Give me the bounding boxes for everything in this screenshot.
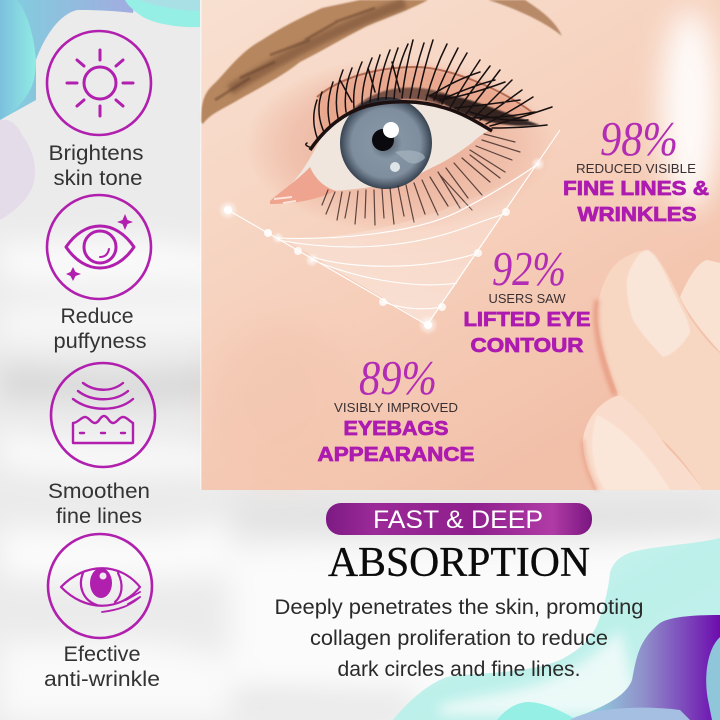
stat: 89%: APPEARANCE	[318, 443, 474, 466]
stat: 89%: EYEBAGS	[344, 417, 448, 440]
lid and under-eye shading	[245, 57, 555, 233]
stat: 98%: FINE LINES &	[563, 177, 709, 200]
heading: absorption: ABSORPTION	[328, 540, 590, 586]
stat: 89%: VISIBLY IMPROVED	[334, 400, 458, 415]
lift web fill	[283, 164, 538, 325]
cheek highlight	[660, 10, 720, 210]
bottom-right wave shapes	[393, 538, 720, 720]
benefit: smoothen fine lines: Smoothen	[48, 480, 150, 503]
benefit: brightens skin tone: Brightens	[48, 142, 144, 165]
stat: 92%: USERS SAW	[488, 291, 566, 306]
body text: collagen proliferation to reduce	[310, 627, 608, 650]
benefit: effective anti-wrinkle	[44, 534, 160, 691]
benefit: effective anti-wrinkle: Efective	[64, 643, 140, 666]
lift web lines	[228, 130, 560, 325]
stat: 89%	[318, 350, 474, 466]
stat: 92%: 92%	[492, 241, 566, 296]
benefit: effective anti-wrinkle: anti-wrinkle	[44, 668, 160, 691]
fingers	[597, 251, 720, 490]
stat: 98%	[563, 111, 709, 226]
benefit: reduce puffiness: Reduce	[60, 305, 134, 328]
eyebrow left	[201, 0, 428, 124]
eyebrow right	[488, 0, 562, 36]
upper lid line	[310, 102, 492, 150]
body text: Deeply penetrates the skin, promoting	[274, 596, 644, 619]
eye white	[272, 102, 490, 203]
body text: dark circles and fine lines.	[338, 658, 580, 681]
icon: sun	[47, 31, 151, 135]
icon: eye with sparkles	[47, 195, 151, 299]
lift web sparkle points	[218, 157, 545, 335]
eye photo panel	[200, 0, 720, 490]
top-left teal shapes	[0, 0, 200, 220]
benefit: reduce puffiness	[47, 195, 151, 353]
iris	[340, 97, 432, 189]
stat: 92%: CONTOUR	[470, 334, 584, 357]
lower lashes	[322, 134, 520, 225]
stat: 98%: REDUCED VISIBLE	[576, 161, 696, 176]
pupil	[372, 129, 394, 151]
icon: skin layers	[51, 363, 155, 467]
left edge of photo	[200, 0, 202, 490]
eye highlights	[383, 122, 399, 138]
benefit: reduce puffiness: puffyness	[54, 330, 146, 353]
pill: fast and deep: FAST & DEEP	[373, 506, 543, 534]
benefit: brightens skin tone	[47, 31, 151, 190]
stat: 98%: WRINKLES	[578, 203, 696, 226]
upper lashes	[306, 40, 552, 148]
icon: eye with wrinkles	[48, 534, 152, 638]
pill: fast and deep	[326, 503, 592, 535]
body text	[274, 596, 644, 681]
benefit: brightens skin tone: skin tone	[54, 167, 142, 190]
stat: 92%	[464, 241, 590, 357]
benefit: smoothen fine lines	[48, 363, 155, 528]
stat: 89%: 89%	[359, 350, 437, 405]
benefit: smoothen fine lines: fine lines	[56, 505, 142, 528]
stat: 92%: LIFTED EYE	[464, 308, 590, 331]
stat: 98%: 98%	[600, 111, 678, 166]
